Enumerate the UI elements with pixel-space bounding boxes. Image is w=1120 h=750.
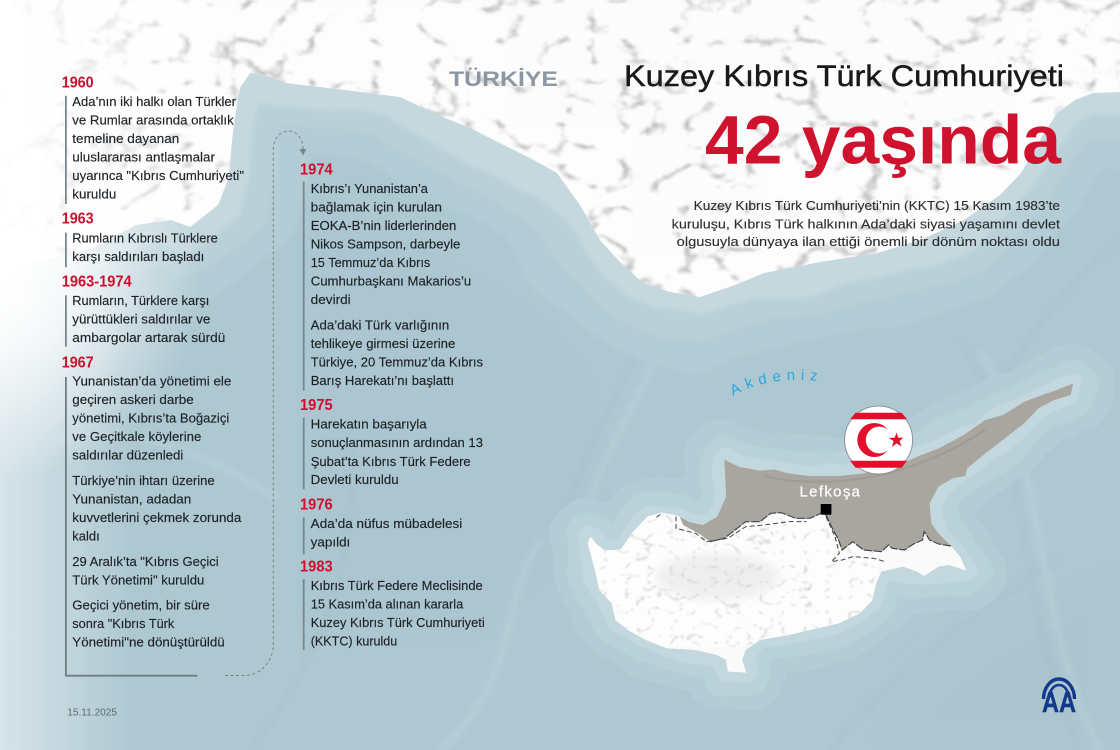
entry 1967: Yunanistan, adadan [72, 492, 191, 506]
entry 1960: Ada’nın iki halkı olan Türkler [72, 94, 237, 109]
entry 1975: sonuçlanmasının ardından 13 [311, 435, 483, 450]
entry 1960: uluslararası antlaşmalar [72, 150, 216, 164]
entry 1974: bağlamak için kurulan [311, 200, 442, 214]
title: 42 yaşında [705, 101, 1062, 178]
left white fade [0, 80, 200, 750]
date: 15.11.2025 [67, 708, 117, 719]
entry 1974: Ada’daki Türk varlığının [311, 318, 449, 333]
map: coastal bands of Türkiye [0, 73, 1120, 300]
entry 1967: Geçici yönetim, bir süre [72, 598, 210, 613]
entry 1963: karşı saldırıları başladı [72, 249, 204, 264]
entry 1967: geçiren askeri darbe [72, 392, 194, 407]
entry 1975: Şubat’ta Kıbrıs Türk Federe [311, 454, 471, 469]
intro paragraph: olgusuyla dünyaya ilan ettiği önemli bir dönüm noktası oldu [677, 234, 1060, 249]
entry 1974: devirdi [311, 292, 351, 307]
entry 1960: ve Rumlar arasında ortaklık [72, 112, 234, 128]
intro paragraph: kuruluşu, Kıbrıs Türk halkının Ada’daki siyasi yaşamını devlet [672, 216, 1060, 231]
entry 1974: Türkiye, 20 Temmuz’da Kıbrıs [311, 355, 483, 370]
entry 1974: tehlikeye girmesi üzerine [311, 336, 455, 351]
entry 1983: (KKTC) kuruldu [311, 634, 397, 649]
entry 1960: 1960 [62, 74, 94, 91]
entry 1975: Devleti kuruldu [311, 472, 399, 487]
sea label: Akdeniz: Akdeniz [732, 369, 817, 396]
entry 1983: Kıbrıs Türk Federe Meclisinde [311, 578, 483, 593]
entry 1983: Kuzey Kıbrıs Türk Cumhuriyeti [311, 615, 485, 630]
entry 1963: 1963 [62, 210, 94, 227]
entry 1967: kaldı [72, 528, 100, 544]
entry 1976 [300, 496, 462, 554]
map: Türkiye land relief [0, 0, 1120, 310]
entry 1967: sonra "Kıbrıs Türk [72, 616, 175, 631]
entry 1963-1974: 1963-1974 [62, 274, 132, 291]
north part of island [680, 383, 1073, 552]
timeline column 2 [300, 161, 485, 650]
entry 1974: 1974 [300, 161, 333, 178]
title: Kuzey Kıbrıs Türk Cumhuriyeti [624, 60, 1064, 93]
buffer zone dashed line [656, 513, 885, 562]
entry 1974: EOKA-B’nin liderlerinden [311, 218, 456, 233]
entry 1974: 15 Temmuz’da Kıbrıs [311, 255, 431, 270]
entry 1963-1974: yürüttükleri saldırılar ve [72, 312, 210, 326]
entry 1974: Barış Harekatı’nı başlattı [311, 373, 454, 388]
capital label: Lefkoşa: Lefkoşa [800, 484, 861, 500]
entry 1967: yönetimi, Kıbrıs’ta Boğaziçi [72, 410, 229, 426]
capital label: Lefkoşa [800, 484, 861, 515]
entry 1967: 29 Aralık’ta "Kıbrıs Geçici [72, 554, 219, 569]
entry 1967: Türk Yönetimi" kuruldu [72, 572, 204, 588]
entry 1976: Ada’da nüfus mübadelesi [311, 516, 462, 531]
entry 1967: Yönetimi"ne dönüştürüldü [72, 635, 225, 650]
border line [710, 513, 951, 552]
logo: AA [1042, 679, 1076, 719]
entry 1967: saldırılar düzenledi [72, 448, 183, 462]
entry 1983: 15 Kasım’da alınan kararla [311, 597, 464, 612]
entry 1960 [62, 74, 244, 204]
entry 1963-1974: ambargolar artarak sürdü [72, 330, 225, 345]
country label: Türkiye: TÜRKİYE [449, 68, 558, 91]
island shallow-water halo [590, 383, 1073, 673]
entry 1967: Yunanistan’da yönetimi ele [72, 374, 231, 389]
entry 1960: temeline dayanan [72, 131, 179, 146]
entry 1967 [62, 354, 242, 676]
entry 1963-1974 [62, 274, 225, 347]
timeline column 1 [62, 74, 244, 676]
map: Cyprus island [585, 383, 1073, 673]
entry 1974: Cumhurbaşkanı Makarios’u [311, 274, 471, 288]
intro paragraph [672, 198, 1060, 249]
entry 1975: Harekatın başarıyla [311, 417, 427, 432]
entry 1960: uyarınca "Kıbrıs Cumhuriyeti" [72, 168, 244, 183]
entry 1967: kuvvetlerini çekmek zorunda [72, 510, 242, 525]
land relief on Cyprus [585, 507, 878, 647]
entry 1974: Kıbrıs’ı Yunanistan’a [311, 181, 429, 196]
entry 1976: 1976 [300, 496, 333, 513]
south part of island [588, 383, 1073, 673]
logo: AA: AA [1042, 687, 1076, 719]
dashed connector arrow [225, 131, 306, 675]
entry 1983: 1983 [300, 559, 333, 576]
entry 1967: Türkiye’nin ihtarı üzerine [72, 473, 215, 488]
flag of KKTC [845, 406, 913, 474]
entry 1963 [62, 210, 218, 267]
intro paragraph: Kuzey Kıbrıs Türk Cumhuriyeti’nin (KKTC) 15 Kasım 1983’te [694, 198, 1060, 213]
entry 1976: yapıldı [311, 534, 350, 550]
entry 1983 [300, 559, 485, 650]
entry 1967: ve Geçitkale köylerine [72, 429, 201, 444]
entry 1974 [300, 161, 483, 391]
northern range ridge [764, 430, 985, 482]
entry 1975 [300, 397, 483, 489]
entry 1967: 1967 [62, 354, 94, 371]
entry 1974: Nikos Sampson, darbeyle [311, 237, 460, 252]
title [624, 60, 1064, 178]
entry 1960: kuruldu [72, 186, 116, 202]
entry 1963: Rumların Kıbrıslı Türklere [72, 230, 218, 245]
entry 1975: 1975 [300, 397, 333, 414]
entry 1963-1974: Rumların, Türklere karşı [72, 293, 209, 308]
